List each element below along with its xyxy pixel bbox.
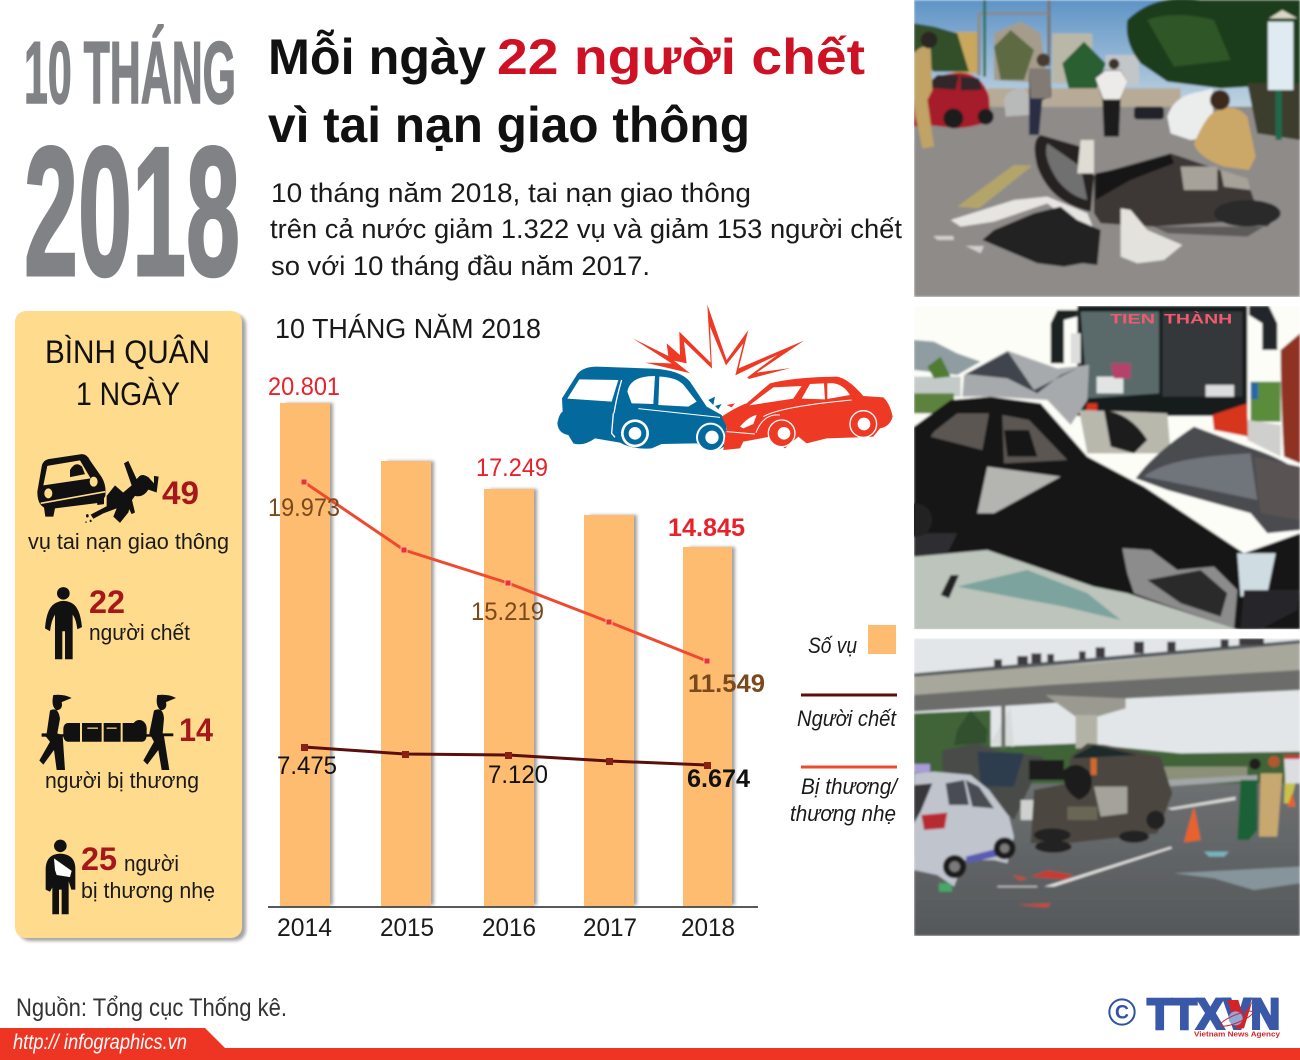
chart heading: 10 THÁNG NĂM 2018 [275,313,541,344]
data labels: 6.674 [687,765,750,793]
year labels: 2018 [681,914,735,942]
logo: TTXVN: TTXVN [1147,991,1280,1039]
title [268,29,865,153]
bars: số vụ [280,403,735,906]
panel heading [45,334,210,412]
stat: 14 [45,712,213,793]
stat: 25: bị thương nhẹ [81,878,215,903]
intro text: so với 10 tháng đầu năm 2017. [271,251,650,281]
source: Nguồn: Tổng cục Thống kê. [16,994,287,1022]
data labels: 7.475 [277,752,337,780]
intro text: 10 tháng năm 2018, tai nạn giao thông [271,178,751,208]
heading: 10 tháng 2018 [24,23,240,314]
title: Mỗi ngày [268,29,486,85]
bar chart [268,373,765,942]
year labels: 2014 [277,914,332,942]
footer bar: http:// infographics.vn [13,1031,187,1054]
legend: Người chết [797,706,897,731]
data labels: 20.801 [268,373,340,401]
intro text [270,178,903,281]
legend: Bị thương/ [801,774,899,799]
line: bị thương [301,479,710,664]
stat: 22: 22 [89,584,125,620]
logo: TTXVN: Vietnam News Agency [1194,1030,1281,1039]
title: vì tai nạn giao thông [268,97,750,153]
legend: Số vụ [808,633,857,658]
icon: car hitting motorbike [37,454,159,523]
legend: thương nhẹ [790,801,896,826]
stat: 49: vụ tai nạn giao thông [28,529,229,554]
line: người chết [301,744,711,769]
panel: bình quân 1 ngày [15,311,246,941]
photo: overturned truck under overpass [914,638,1300,936]
stat: 49 [28,475,229,554]
icon: person [45,587,82,659]
year labels: 2016 [482,914,536,942]
stat: 14: 14 [179,712,213,748]
heading: 10 tháng 2018: 2018 [24,108,240,314]
stat: 25: người [124,851,179,876]
data labels [268,373,765,793]
intro text: trên cả nước giảm 1.322 vụ và giảm 153 người chết [270,214,903,244]
stat: 25: 25 [81,841,117,877]
photo: crushed black car and bus [899,306,1300,629]
stat: 14: người bị thương [45,768,199,793]
axis [268,906,758,908]
photo: crushed black car and bus: THÀNH [1164,310,1232,326]
photo: crushed black car and bus: TIEN [1110,310,1155,326]
stat: 49: 49 [162,475,199,511]
title: 22 người chết [497,29,865,85]
icon: stretcher [39,695,176,770]
data labels: 14.845 [668,514,745,542]
data labels: 15.219 [471,598,544,626]
panel heading: 1 NGÀY [76,376,180,412]
year labels: 2017 [583,914,637,942]
icon: two cars colliding [557,305,893,452]
stat: 22 [89,584,190,645]
text: 10 THÁNG [24,23,236,122]
panel heading: BÌNH QUÂN [45,334,210,370]
data labels: 17.249 [476,454,548,482]
logo: TTXVN: C [1115,1003,1129,1024]
stat: 22: người chết [89,620,190,645]
photo: scooter crash [914,0,1300,297]
stat: 25 [81,841,215,903]
year labels: 2015 [380,914,434,942]
icon: injured person [46,840,75,914]
legend [790,625,899,826]
data labels: 7.120 [488,761,548,789]
year labels [277,914,735,942]
footer bar [0,1028,1300,1060]
data labels: 19.973 [268,494,340,522]
data labels: 11.549 [688,670,765,698]
